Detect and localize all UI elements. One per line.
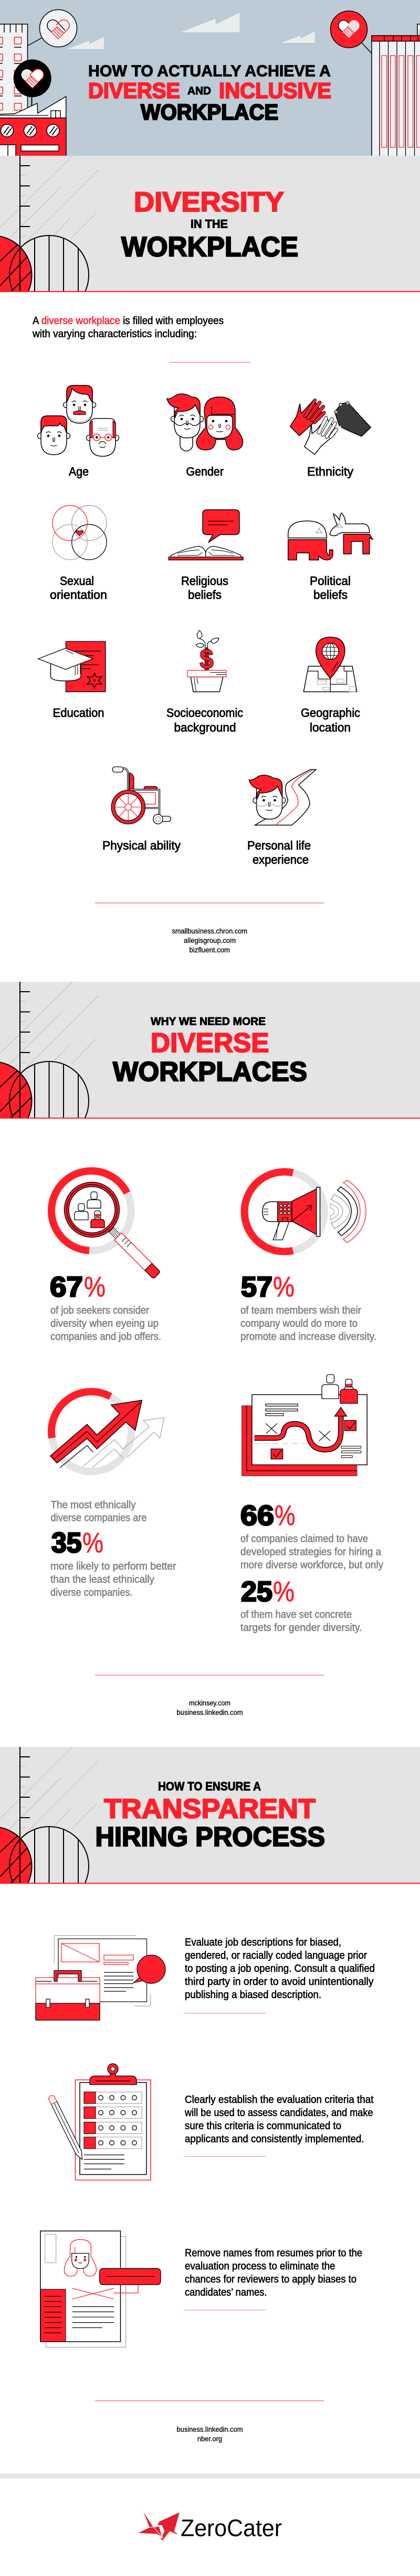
label: socioeconomic background: [166, 706, 243, 734]
icon: elephant and donkey: [288, 513, 373, 560]
sources: [172, 927, 247, 954]
description: company would do more to: [240, 1318, 358, 1329]
figure: [50, 1271, 106, 1303]
icon: black heart bubble: [14, 59, 51, 106]
description: [50, 1305, 161, 1343]
figure: 25%: %: [273, 1576, 295, 1607]
icon: ring and magnifier: [51, 1171, 161, 1279]
heading: WORKPLACES: [113, 1057, 307, 1087]
label: personal life experience: Personal life: [247, 839, 311, 852]
text: Evaluate job descriptions for biased,: [185, 1937, 341, 1948]
description 25%: targets for gender diversity.: [240, 1622, 362, 1634]
text: Clearly establish the evaluation criteria that: [185, 2094, 374, 2106]
intro text: [32, 315, 224, 340]
label: religious beliefs: [181, 574, 228, 602]
figure: 25%: [241, 1576, 295, 1607]
label: personal life experience: [247, 839, 311, 866]
description: of job seekers consider: [50, 1305, 149, 1316]
heading: DIVERSITY: [134, 187, 284, 218]
text: Remove names from resumes prior to the: [185, 2248, 362, 2259]
figure: [241, 1271, 295, 1303]
figure: 67: [50, 1271, 83, 1303]
description 66%: more diverse workforce, but only: [240, 1560, 383, 1571]
icon: age faces: [38, 385, 119, 456]
sources: business.linkedin.com: [176, 2425, 243, 2433]
label: geographic location: [301, 706, 360, 734]
icon: ring and megaphone: [245, 1172, 366, 1252]
logo: ZeroCater: [138, 2512, 282, 2541]
heading: WORKPLACE: [121, 232, 298, 262]
sources: mckinsey.com: [189, 1699, 230, 1707]
text: applicants and consistently implemented.: [185, 2133, 364, 2145]
icon: money plant: $: [200, 643, 214, 675]
figure: [51, 1527, 103, 1559]
description: of team members wish their: [240, 1305, 361, 1316]
stat: 35%: [50, 1392, 176, 1598]
text: will be used to assess candidates, and make: [184, 2107, 373, 2119]
text: evaluation process to eliminate the: [185, 2260, 335, 2272]
title: DIVERSE: [88, 78, 180, 103]
text: [185, 2248, 362, 2298]
icon: ring and rising arrows: [50, 1392, 164, 1472]
heading: IN THE: [191, 217, 228, 231]
description: companies and job offers.: [50, 1331, 161, 1343]
title: HOW TO ACTUALLY ACHIEVE A: [88, 62, 331, 80]
title: WORKPLACE: [141, 100, 278, 124]
label: religious beliefs: Religious: [181, 574, 228, 587]
sources: nber.org: [197, 2435, 222, 2443]
description 66%: [240, 1533, 383, 1571]
icon: red heart bubble: [331, 11, 372, 53]
description bottom: diverse companies.: [50, 1587, 132, 1598]
title: AND: [187, 85, 211, 97]
figure: 25%: 25: [241, 1576, 272, 1607]
text: [185, 1937, 375, 2001]
stat: 67%: [50, 1171, 161, 1343]
description 66%: of companies claimed to have: [240, 1533, 368, 1545]
heading: [121, 187, 298, 262]
figure: %: [82, 1527, 103, 1559]
label: age: Age: [69, 465, 89, 478]
description bottom: more likely to perform better: [50, 1561, 176, 1572]
icon: job description and briefcase: [36, 1936, 165, 2020]
heading: [113, 1015, 307, 1087]
icon: map pin: [303, 637, 357, 692]
text: gendered, or racially coded language prior: [185, 1950, 367, 1961]
label: sexual orientation: [50, 574, 107, 602]
description top: The most ethnically: [50, 1499, 135, 1511]
section band: transparent hiring process: [0, 1747, 420, 1906]
right tower: [372, 24, 420, 157]
text: publishing a biased description.: [185, 1989, 321, 2001]
intro text: A diverse workplace is filled with employees: [33, 315, 224, 327]
label: political beliefs: Political: [310, 574, 351, 587]
sources: allegisgroup.com: [184, 937, 236, 944]
sources: [176, 2425, 243, 2443]
left office building: [0, 24, 27, 116]
sources: bizfluent.com: [189, 946, 230, 954]
icon: resume with name removed: [40, 2231, 161, 2347]
heading: TRANSPARENT: [104, 1794, 316, 1824]
header panel: [0, 0, 420, 157]
label: gender: Gender: [186, 465, 224, 478]
text: chances for reviewers to apply biases to: [185, 2274, 356, 2285]
sources: [176, 1699, 243, 1716]
description top: diverse companies are: [50, 1512, 147, 1524]
heading: WHY WE NEED MORE: [151, 1015, 266, 1028]
heading: HOW TO ENSURE A: [158, 1779, 261, 1793]
icon: sound waves: [330, 1180, 366, 1243]
figure: 66%: 66: [240, 1500, 274, 1531]
label: sexual orientation: orientation: [50, 588, 107, 602]
step 3: [40, 2231, 362, 2347]
icon: graduation cap and diploma: [38, 641, 106, 692]
title: [88, 62, 331, 124]
stat: 57%: [240, 1172, 376, 1343]
label: personal life experience: experience: [253, 853, 309, 866]
description 25%: of them have set concrete: [240, 1609, 352, 1620]
description 66%: developed strategies for hiring a: [240, 1546, 382, 1558]
clouds: [67, 13, 315, 49]
section band: diversity in the workplace: [0, 156, 420, 315]
label: ethnicity: Ethnicity: [307, 465, 353, 478]
heading: [96, 1779, 325, 1852]
step 2: [48, 2064, 374, 2180]
icon: hands: [290, 400, 371, 454]
description: diversity when eyeing up: [50, 1318, 159, 1329]
label: geographic location: Geographic: [301, 706, 360, 720]
text: [184, 2094, 374, 2145]
description top: [50, 1499, 147, 1524]
figure: 66%: [240, 1500, 295, 1531]
heading: DIVERSE: [151, 1028, 269, 1058]
intro text: with varying characteristics including:: [32, 328, 197, 340]
stat: 66% and 25%: [240, 1375, 383, 1634]
label: political beliefs: beliefs: [313, 588, 348, 602]
label: physical ability: Physical ability: [102, 839, 181, 852]
logo: ZeroCater: ZeroCater: [181, 2515, 282, 2541]
icon: strategy board: [242, 1394, 367, 1476]
icon: clipboard and pencil: [48, 2064, 151, 2180]
description 25%: [240, 1609, 362, 1634]
label: education: Education: [52, 706, 104, 720]
text: candidates’ names.: [185, 2287, 267, 2298]
figure: 57: [241, 1271, 272, 1303]
description bottom: [50, 1561, 176, 1598]
icon: origami crane: [138, 2512, 180, 2541]
icon: venn diagram: [52, 506, 107, 560]
description: [240, 1305, 376, 1343]
description: promote and increase diversity.: [240, 1331, 376, 1343]
label: religious beliefs: beliefs: [188, 588, 222, 602]
icon: white heart bubble: [28, 9, 77, 47]
sources: business.linkedin.com: [176, 1709, 243, 1716]
heading: HIRING PROCESS: [96, 1822, 325, 1852]
icon: person and winding road: [249, 769, 316, 825]
icon: gender faces: [167, 394, 243, 451]
figure: 66%: %: [275, 1500, 295, 1531]
label: political beliefs: [310, 574, 351, 602]
icon: two people: [322, 1375, 358, 1403]
icon: wheelchair: [111, 767, 171, 824]
text: sure this criteria is communicated to: [185, 2120, 341, 2132]
label: geographic location: location: [310, 721, 351, 734]
factory: [0, 96, 66, 157]
description bottom: than the least ethnically: [50, 1574, 154, 1585]
text: third party in order to avoid unintentionally: [185, 1976, 374, 1988]
figure: %: [84, 1271, 106, 1303]
icon: book and speech bubble: [169, 510, 243, 560]
title: INCLUSIVE: [219, 78, 331, 103]
sources: smallbusiness.chron.com: [172, 927, 247, 935]
label: socioeconomic background: Socioeconomic: [166, 706, 243, 720]
icon: money plant: [187, 630, 226, 692]
figure: 35: [51, 1527, 82, 1559]
step 1: [36, 1936, 375, 2020]
figure: %: [273, 1271, 295, 1303]
text: to posting a job opening. Consult a qualified: [185, 1963, 375, 1974]
label: sexual orientation: Sexual: [60, 574, 94, 587]
section band: why we need more diverse workplaces: [0, 982, 420, 1141]
label: socioeconomic background: background: [174, 721, 236, 734]
